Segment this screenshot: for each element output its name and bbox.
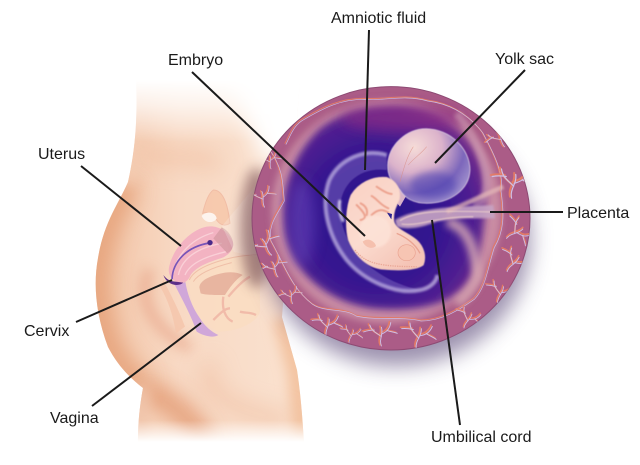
amnion bbox=[325, 153, 437, 291]
amnion inner highlight bbox=[339, 200, 343, 222]
label: vagina: Vagina bbox=[50, 410, 99, 427]
stalk upper band bbox=[447, 187, 503, 212]
light inner rim band bbox=[272, 100, 502, 323]
leader: yolk sac bbox=[435, 70, 525, 163]
shadow below disc bbox=[262, 114, 530, 366]
magnified view disc bbox=[243, 87, 537, 352]
stalk vessels bbox=[400, 211, 493, 224]
uterus cavity bbox=[172, 243, 209, 279]
label: amniotic fluid: Amniotic fluid bbox=[331, 10, 426, 27]
leader: vagina bbox=[92, 323, 201, 406]
body shading bbox=[96, 92, 304, 438]
gut opening bbox=[387, 213, 392, 219]
amnion interior wash bbox=[325, 153, 420, 291]
embryo bbox=[346, 177, 425, 270]
embryo body bbox=[346, 177, 425, 270]
implantation site bbox=[207, 240, 213, 245]
circle shadow bbox=[240, 114, 530, 366]
label: placenta: Placenta bbox=[567, 205, 629, 222]
label: yolk sac: Yolk sac bbox=[495, 51, 554, 68]
neural folds bbox=[357, 187, 392, 220]
ovary bbox=[203, 190, 230, 225]
bladder lumen bbox=[199, 272, 243, 295]
amniotic cavity bbox=[284, 107, 485, 309]
bladder outline bbox=[189, 255, 260, 282]
bowel loops bbox=[213, 277, 256, 322]
upper magenta tint bbox=[340, 105, 467, 132]
leader: uterus bbox=[81, 166, 181, 246]
leader lines bbox=[76, 30, 563, 425]
pelvic organs: bladder and rectum bbox=[189, 255, 260, 332]
wavy rim vessels bbox=[268, 97, 503, 321]
body silhouette bbox=[96, 80, 304, 442]
connecting stalk bbox=[395, 205, 495, 228]
cervix tip bbox=[163, 275, 183, 285]
right chorion fold bbox=[457, 113, 487, 205]
spine segments bbox=[355, 250, 417, 267]
cone overlay on fundus bbox=[213, 227, 233, 253]
limb bud upper bbox=[363, 240, 376, 248]
illustration: body side view bbox=[96, 88, 304, 440]
leader: umbilical cord bbox=[432, 220, 460, 425]
leader: cervix bbox=[76, 280, 172, 322]
label: uterus: Uterus bbox=[38, 146, 85, 163]
leader: embryo bbox=[192, 72, 365, 236]
vaginal canal pale bbox=[160, 280, 185, 333]
limb bud lower bbox=[398, 245, 415, 261]
label: umbilical cord: Umbilical cord bbox=[431, 429, 531, 446]
leader: placenta bbox=[490, 211, 563, 213]
stalk lower band bbox=[447, 222, 478, 303]
vagina bbox=[174, 282, 218, 337]
magnification cone bbox=[222, 178, 262, 258]
upper right fade bbox=[239, 92, 298, 166]
yolk sac stalk bbox=[397, 188, 406, 206]
ovary highlight bbox=[202, 213, 217, 222]
label: embryo: Embryo bbox=[168, 52, 223, 69]
yolk sac blue pool bbox=[410, 172, 457, 198]
shadow on body bbox=[240, 168, 272, 288]
left violet glow bbox=[288, 180, 315, 267]
disc base bbox=[252, 87, 530, 350]
leader: amniotic fluid bbox=[365, 30, 369, 170]
uterus bbox=[169, 226, 233, 283]
uterus and pelvic organs bbox=[160, 190, 260, 337]
yolk sac bbox=[388, 129, 470, 203]
tail fold bbox=[397, 233, 420, 253]
uterus wall rings bbox=[173, 233, 226, 275]
label: cervix: Cervix bbox=[24, 323, 69, 340]
heart bulge bbox=[362, 215, 390, 247]
yolk sac vessels bbox=[400, 147, 427, 182]
vein branches bbox=[243, 122, 537, 352]
